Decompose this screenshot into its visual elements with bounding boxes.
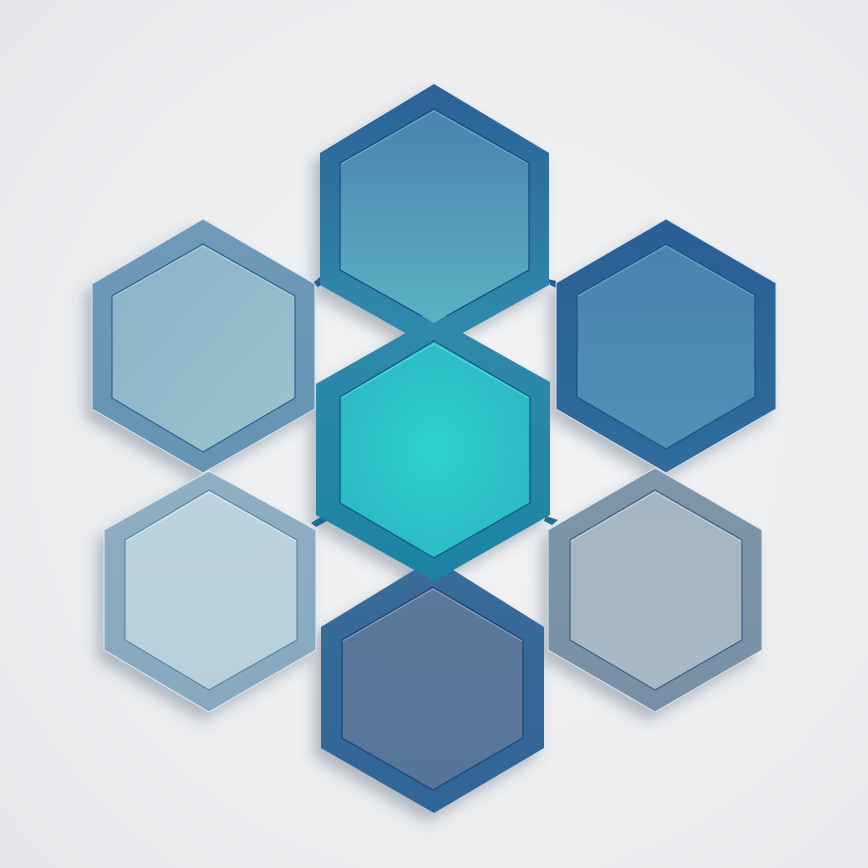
lower left inner panel: [125, 490, 297, 690]
connector: upper left: [313, 277, 324, 287]
hexagon: center: [316, 317, 550, 581]
center inner panel: [340, 341, 530, 558]
top inner panel: [340, 109, 529, 323]
lower right inner panel: [570, 490, 742, 690]
right inner panel: [577, 244, 755, 449]
hexagon: left: [92, 219, 315, 473]
soft shadow layer beneath all hexagons: [85, 93, 769, 822]
connector: lower left: [311, 516, 327, 527]
re-draw of the top inner panel tip over the crossing: [421, 316, 447, 323]
hexagon: lower right: [548, 468, 762, 712]
connector: lower right: [544, 516, 558, 525]
hexagon: top: [320, 84, 549, 349]
hexagon: right: [556, 219, 776, 473]
hexagon: lower left: [104, 471, 316, 712]
hexagon: bottom: [321, 558, 544, 813]
left inner panel: [112, 244, 295, 452]
bottom inner panel: [342, 587, 523, 790]
connector: upper right: [548, 279, 556, 288]
bevel highlights on inner panels: [113, 111, 754, 641]
